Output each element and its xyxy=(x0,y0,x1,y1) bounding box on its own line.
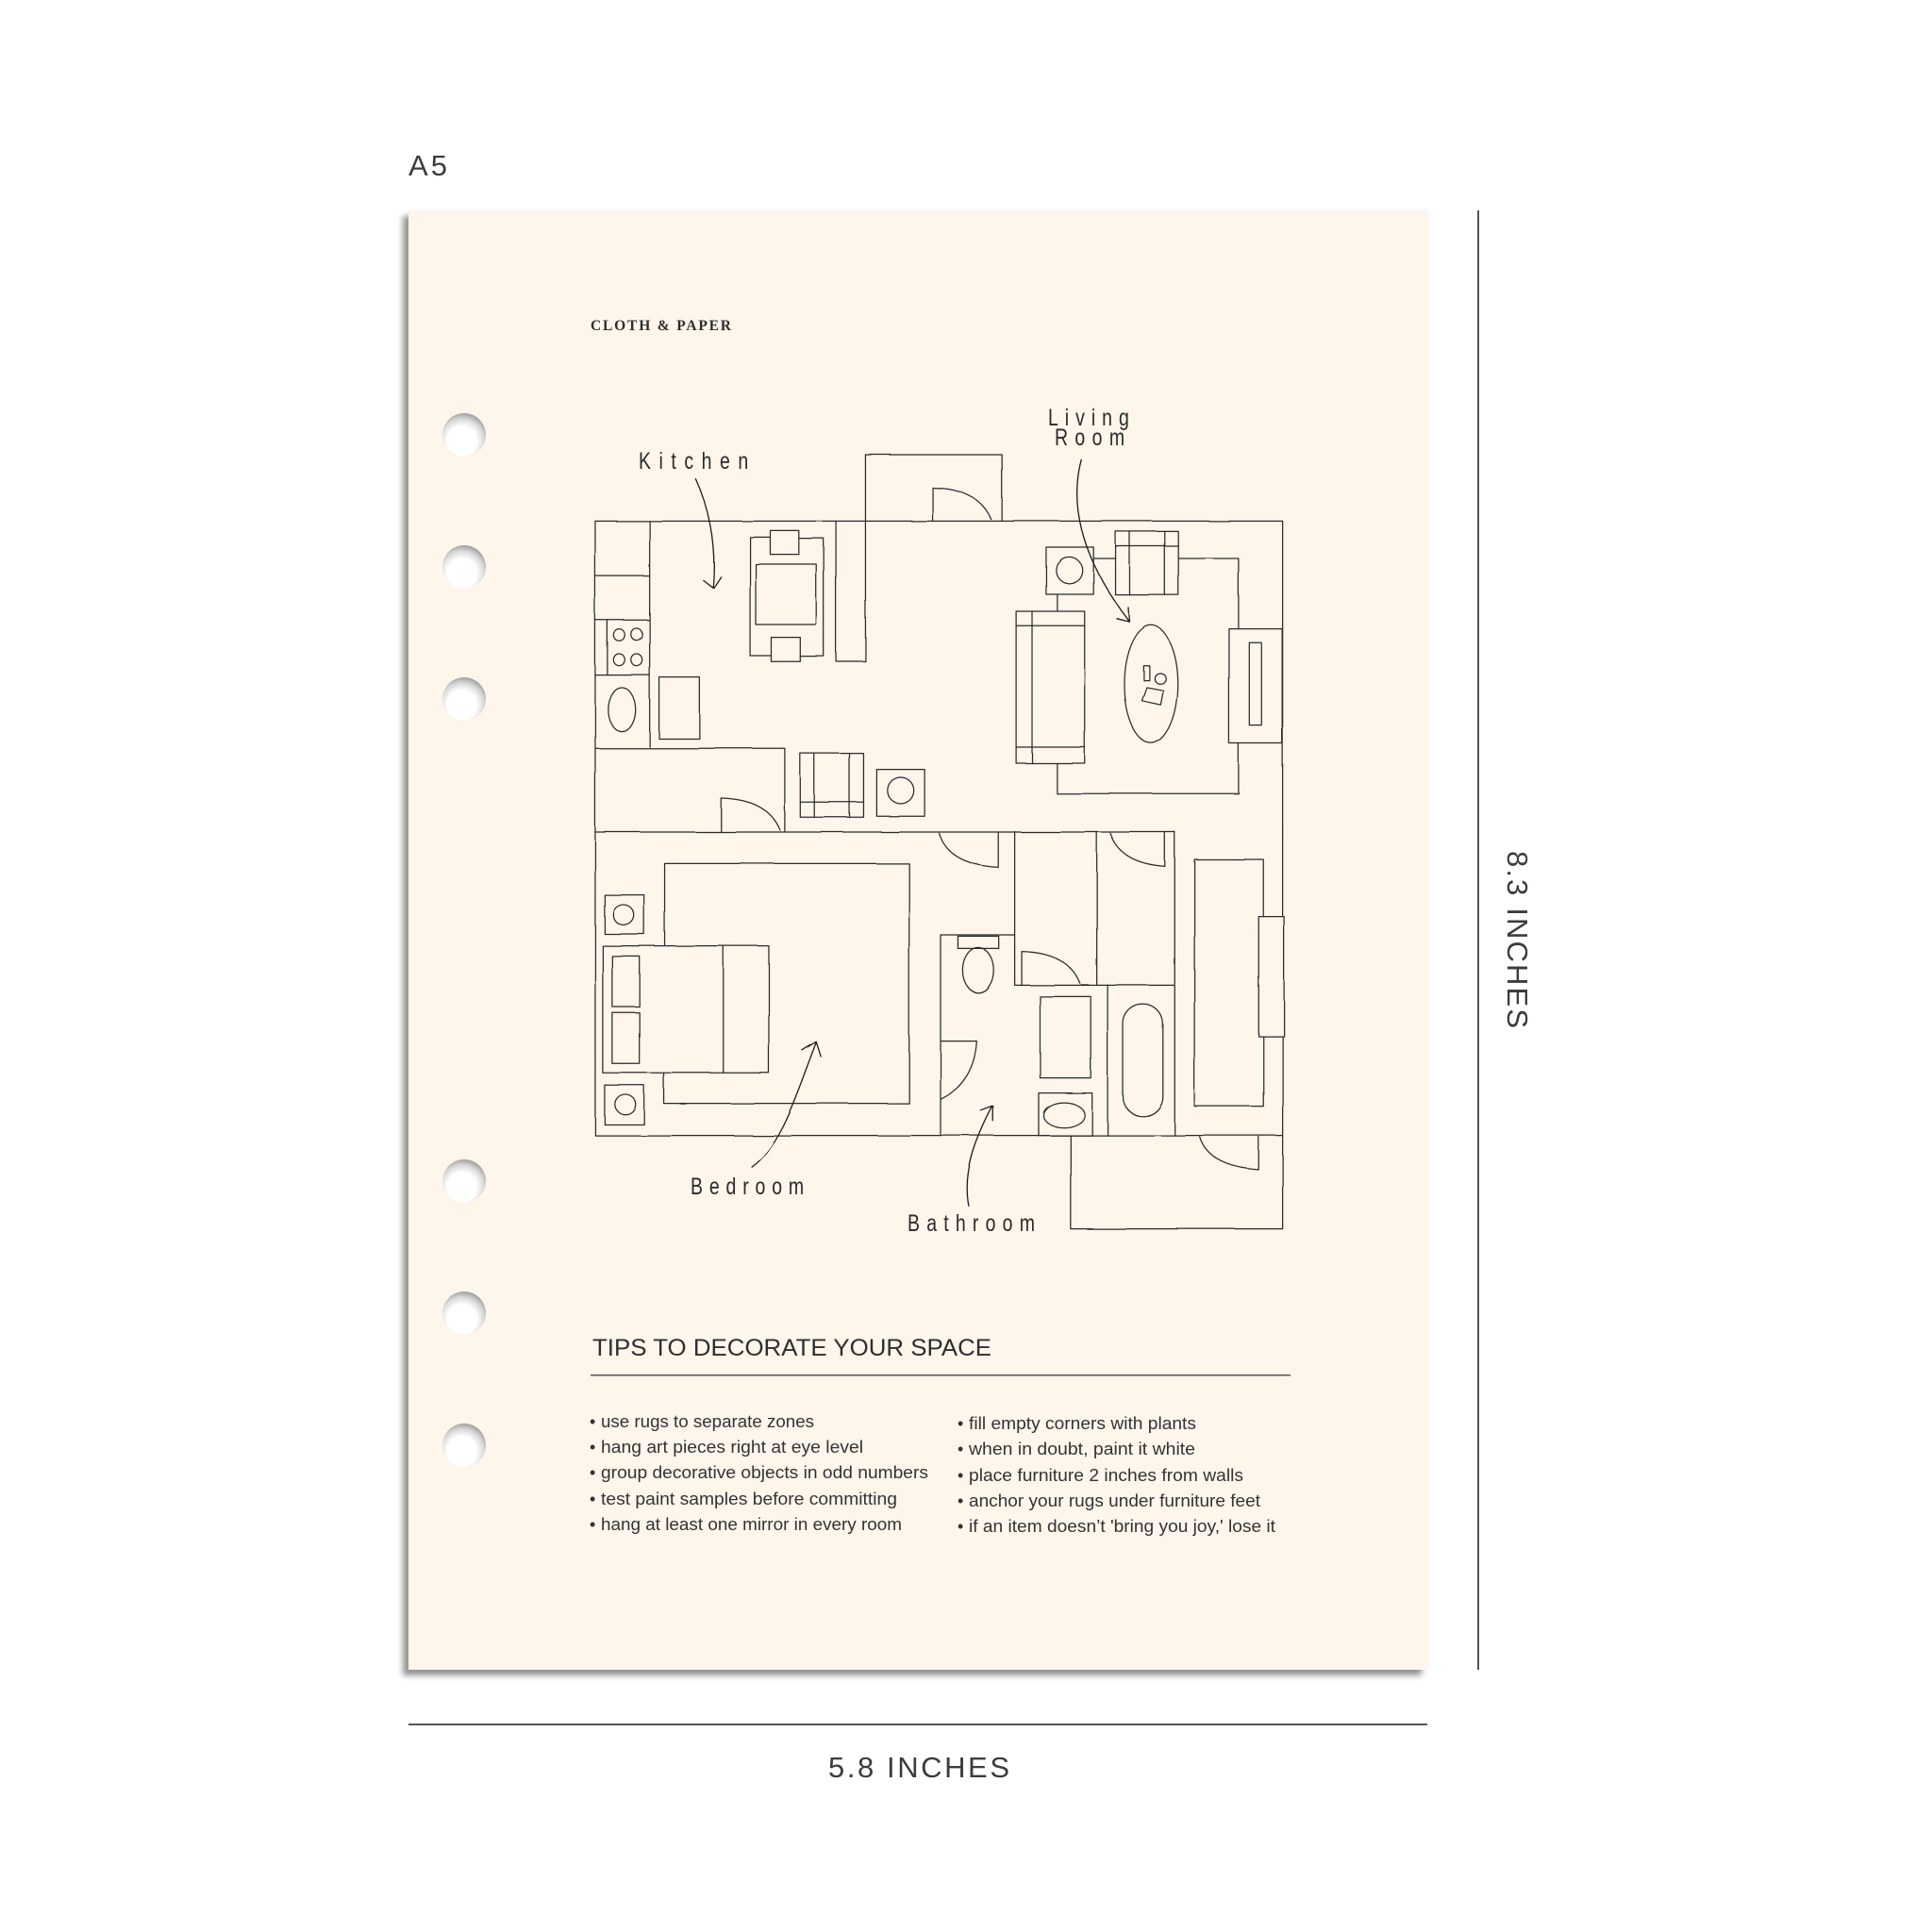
panel: cream A5 planner sheet xyxy=(408,210,1427,1670)
vanity xyxy=(1040,996,1091,1078)
tips list: left column: • xyxy=(590,1438,595,1457)
tv console xyxy=(1229,629,1282,743)
outer walls and upper balcony xyxy=(595,455,1283,832)
tips list: right column: anchor your rugs under furniture feet xyxy=(969,1491,1260,1510)
tips list: left column: hang at least one mirror in every room xyxy=(601,1515,902,1534)
arrow: living room xyxy=(1077,459,1129,622)
brand name: CLOTH & PAPER xyxy=(591,318,732,334)
arrow: kitchen xyxy=(695,479,721,588)
bathtub xyxy=(1124,1005,1163,1116)
label: kitchen: Kitchen xyxy=(639,448,748,475)
tips list: right column: • xyxy=(958,1517,963,1536)
tips list: left column: • xyxy=(590,1412,595,1431)
bathroom sink xyxy=(1039,1093,1092,1136)
partition wall xyxy=(836,521,865,661)
label: A5 size: A5 xyxy=(408,149,447,182)
closet and radiator xyxy=(1194,859,1284,1107)
tips list: left column: hang art pieces right at eye level xyxy=(601,1438,863,1457)
label: bathroom: Bathroom xyxy=(908,1210,1035,1237)
label: living room: Room xyxy=(1055,425,1124,451)
toilet xyxy=(958,936,999,992)
tips list: left column: • xyxy=(590,1463,595,1482)
label: living room xyxy=(1048,405,1129,451)
tips list: left column: use rugs to separate zones xyxy=(601,1412,814,1431)
side table: upper xyxy=(1046,547,1093,594)
entry door xyxy=(933,488,991,521)
tips list: left column: • xyxy=(590,1490,595,1508)
kitchen counters xyxy=(595,521,785,748)
kitchen sink xyxy=(608,688,636,732)
outer walls and lower balcony xyxy=(595,832,1283,1229)
armchair: upper xyxy=(1116,531,1178,595)
tips list: left column xyxy=(590,1412,928,1534)
tips list: right column: • xyxy=(958,1414,963,1433)
nightstands xyxy=(605,895,644,1124)
hallway door xyxy=(721,798,780,832)
bed xyxy=(603,946,769,1073)
sofa xyxy=(1016,611,1085,763)
lower half: bedroom, bathroom, closet xyxy=(595,832,1284,1229)
tips list: left column: group decorative objects in odd numbers xyxy=(601,1463,928,1482)
tips list: right column: • xyxy=(958,1491,963,1510)
tips rule xyxy=(591,1374,1291,1375)
tips list: right column: • xyxy=(958,1466,963,1485)
dimension label: 8.3 inches: 8.3 INCHES xyxy=(1501,851,1534,1028)
label: bedroom: Bedroom xyxy=(691,1174,804,1200)
bedroom rug xyxy=(664,863,909,1104)
tips list: left column: • xyxy=(590,1515,595,1534)
dimension line: sheet height xyxy=(1477,210,1479,1670)
kitchen island xyxy=(659,677,699,739)
stove burners xyxy=(613,628,642,666)
dimension line: sheet width xyxy=(408,1724,1427,1725)
tips list: right column: when in doubt, paint it white xyxy=(968,1440,1195,1458)
armchair: lower xyxy=(800,754,863,817)
side table: lower xyxy=(876,770,924,816)
dimension label: 5.8 inches: 5.8 INCHES xyxy=(828,1751,1009,1784)
living room rug xyxy=(1057,558,1239,793)
tips list: right column: place furniture 2 inches from walls xyxy=(969,1466,1243,1485)
tips list: right column: fill empty corners with plants xyxy=(969,1414,1196,1433)
floor plan xyxy=(595,455,1284,1229)
binder holes xyxy=(442,413,486,1467)
arrow: bedroom xyxy=(752,1041,821,1167)
tips heading: TIPS TO DECORATE YOUR SPACE xyxy=(592,1335,991,1361)
tips list: right column xyxy=(958,1414,1275,1536)
interior walls xyxy=(941,832,1174,1136)
label: living room: Living xyxy=(1048,405,1129,431)
arrow: bathroom xyxy=(967,1107,993,1206)
tips list: right column: if an item doesn’t 'bring you joy,' lose it xyxy=(969,1517,1275,1536)
doors xyxy=(940,833,1258,1170)
dining set xyxy=(750,530,824,661)
upper half: kitchen and living room xyxy=(595,455,1283,832)
tips list: left column: test paint samples before committing xyxy=(601,1490,897,1508)
tips list: right column: • xyxy=(958,1440,963,1458)
coffee table with objects xyxy=(1124,625,1177,743)
